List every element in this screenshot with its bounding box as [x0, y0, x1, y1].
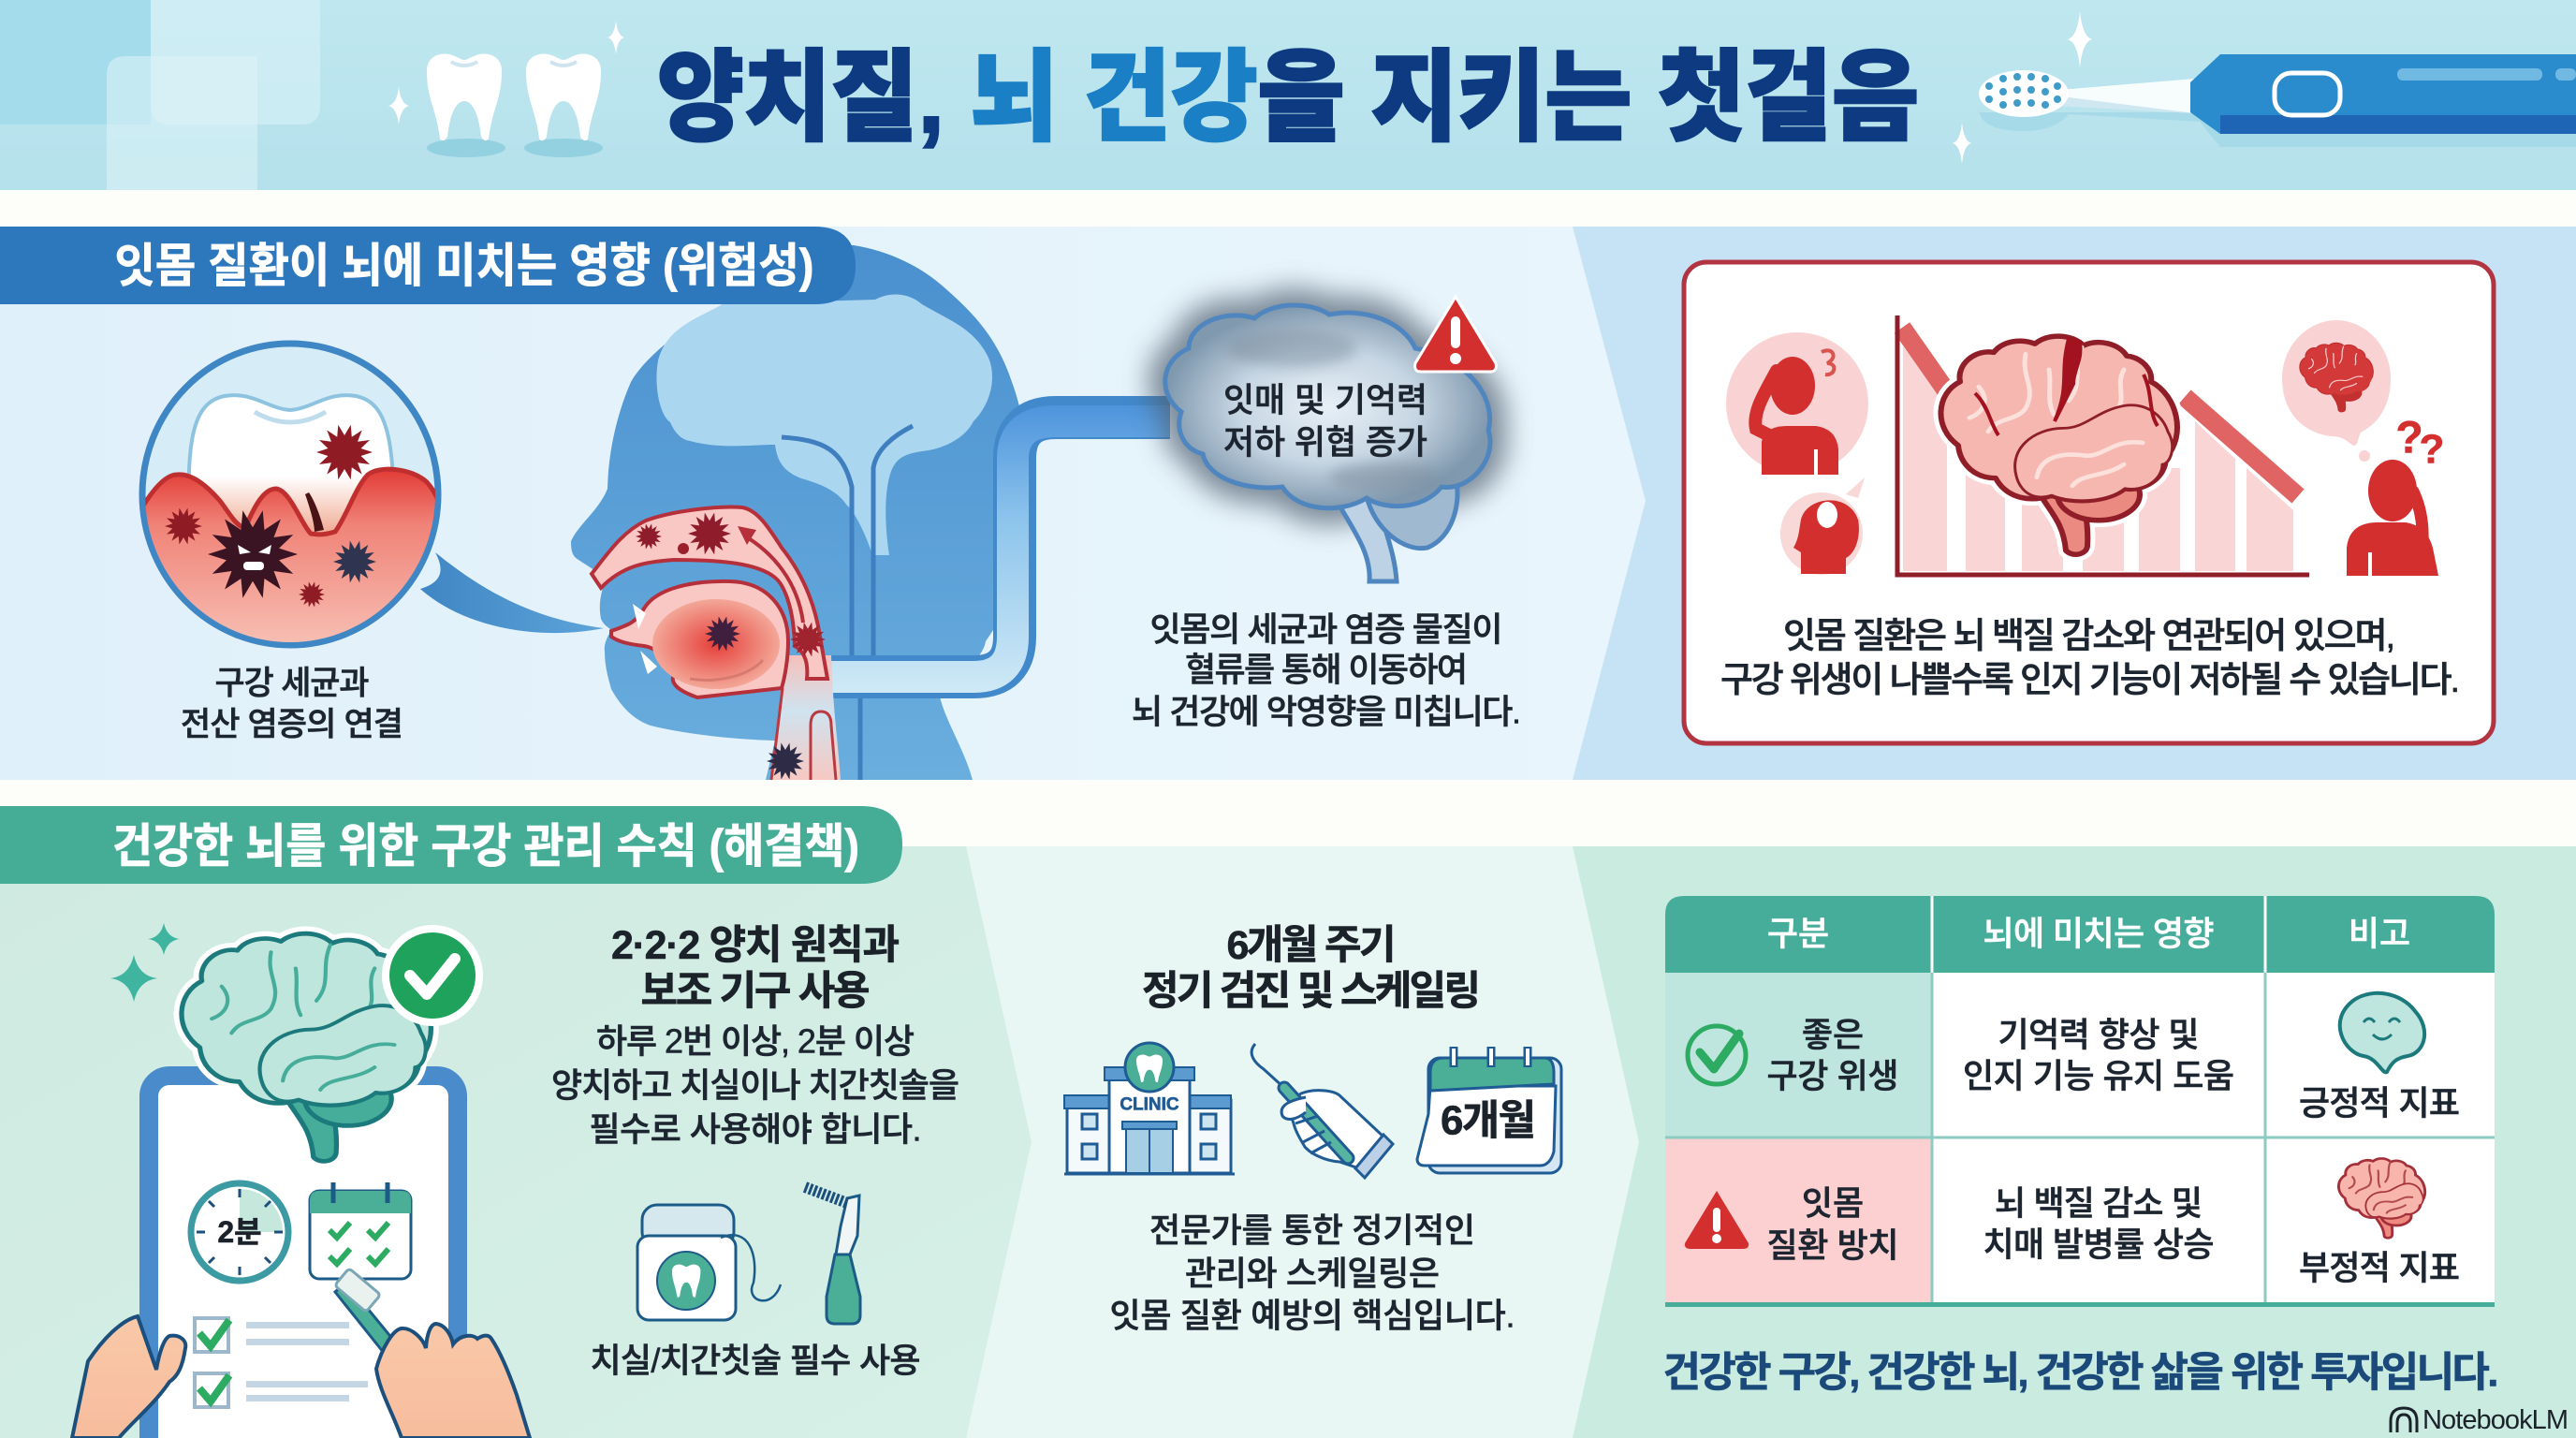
blood vessel pipe	[824, 418, 1170, 677]
icon: happy brain	[2340, 993, 2424, 1072]
six month check-up text	[1142, 923, 1481, 1014]
icon: interdental brush	[805, 1187, 860, 1324]
icon: six month calendar: 6개월	[1441, 1097, 1536, 1144]
gum tissue	[145, 466, 435, 642]
icon: clock 2 minutes	[191, 1183, 288, 1281]
blood flow explanation: 혈류를 통해 이동하여	[1185, 650, 1468, 689]
bacteria in gum	[165, 425, 376, 608]
row: untreated gum disease: 질환 방치	[1767, 1226, 1898, 1264]
table header	[1665, 896, 2495, 973]
six month check-up text: 정기 검진 및 스케일링	[1142, 969, 1481, 1014]
oral bacteria caption: 구강 세균과	[215, 665, 369, 702]
NotebookLM watermark: NotebookLM	[2422, 1405, 2569, 1435]
card explanation: 잇몸 질환은 뇌 백질 감소와 연관되어 있으며,	[1783, 617, 2395, 656]
icon: warning triangle	[1415, 297, 1496, 372]
2-2-2 rule text: 필수로 사용해야 합니다.	[590, 1110, 921, 1148]
scaling explanation: 잇몸 질환 예방의 핵심입니다.	[1110, 1296, 1515, 1335]
table header: 뇌에 미치는 영향	[1983, 914, 2215, 953]
scaling explanation: 전문가를 통한 정기적인	[1149, 1211, 1475, 1249]
icon: confused person: ?	[2395, 414, 2423, 462]
2-2-2 rule text: 하루 2번 이상, 2분 이상	[596, 1022, 915, 1060]
table header: 비고	[2349, 914, 2410, 953]
brain silhouette	[656, 295, 992, 555]
negative indicator label: 부정적 지표	[2299, 1249, 2460, 1286]
heading: risk banner	[0, 227, 856, 304]
head anatomy illustration	[571, 245, 1170, 780]
icon: clock 2 minutes: 2분	[217, 1215, 262, 1249]
panel: cognitive decline card	[1684, 262, 2494, 743]
right hand	[376, 1324, 530, 1438]
icon: green check badge	[382, 925, 483, 1026]
icon: dental clinic: CLINIC	[1120, 1095, 1179, 1114]
heading: solutions banner	[0, 806, 902, 884]
icon: two teeth	[427, 54, 603, 157]
icon: confused person: ?	[2420, 427, 2444, 472]
bacteria in head	[636, 513, 826, 779]
magnifier speech tail	[420, 552, 604, 633]
oral bacteria caption: 전산 염증의 연결	[181, 706, 403, 743]
checklist rows	[195, 1318, 368, 1407]
healthy green brain	[182, 933, 431, 1161]
icon: calendar checks	[310, 1182, 411, 1279]
arrow inside airway	[744, 536, 803, 623]
2-2-2 rule text: 보조 기구 사용	[640, 969, 871, 1014]
decline chart	[1897, 315, 2309, 575]
icon: thought bubble with brain	[2282, 320, 2391, 462]
blood flow explanation: 잇몸의 세균과 염증 물질이	[1149, 610, 1503, 648]
magnified gum circle	[140, 344, 445, 655]
card explanation: 구강 위생이 나쁠수록 인지 기능이 저하될 수 있습니다.	[1720, 661, 2460, 700]
large damaged brain	[1940, 336, 2177, 554]
oral bacteria caption	[181, 665, 403, 743]
row: untreated gum disease: 잇몸	[1802, 1183, 1864, 1223]
heading: solutions banner: 건강한 뇌를 위한 구강 관리 수칙 (해결책)	[112, 820, 859, 873]
comparison table	[1665, 896, 2495, 1307]
icon: sparkles	[110, 923, 180, 1002]
icon: sad brain	[2338, 1158, 2425, 1238]
row: good oral hygiene: 기억력 향상 및	[1998, 1015, 2200, 1054]
tablet checklist illustration	[72, 1076, 530, 1438]
icon: gloved hand with probe	[1251, 1044, 1393, 1178]
foggy brain cloud: 잇매 및 기억력	[1223, 380, 1427, 419]
nerve lines	[782, 426, 913, 780]
panel: oral care solutions section	[0, 806, 2576, 1438]
icon: sparkles in header	[388, 11, 2092, 164]
icon: person holding head	[1726, 332, 1868, 475]
heading: risk banner: 잇몸 질환이 뇌에 미치는 영향 (위험성)	[114, 240, 814, 292]
closing message: 건강한 구강, 건강한 뇌, 건강한 삶을 위한 투자입니다.	[1662, 1350, 2499, 1395]
2-2-2 rule text	[551, 923, 959, 1148]
icon: six month calendar	[1417, 1047, 1561, 1173]
row: good oral hygiene: 구강 위생	[1767, 1056, 1898, 1095]
blood flow explanation	[1132, 610, 1521, 730]
row: good oral hygiene	[1688, 1015, 2234, 1095]
icon: dental clinic	[1064, 1043, 1235, 1174]
table header: 구분	[1767, 914, 1829, 953]
icon: dental floss	[637, 1205, 781, 1320]
tooth	[189, 395, 394, 543]
throat and esophagus	[771, 655, 841, 780]
row: untreated gum disease: 뇌 백질 감소 및	[1995, 1183, 2203, 1223]
six month check-up text: 6개월 주기	[1226, 923, 1397, 968]
row: untreated gum disease	[1685, 1183, 2215, 1264]
scaling explanation: 관리와 스케일링은	[1185, 1255, 1440, 1292]
icon: electric toothbrush	[1979, 54, 2576, 147]
foggy brain cloud: 저하 위협 증가	[1223, 423, 1427, 461]
row: untreated gum disease: 치매 발병률 상승	[1983, 1225, 2215, 1264]
foggy brain cloud	[1165, 305, 1490, 581]
2-2-2 rule text: 2·2·2 양치 원칙과	[611, 923, 900, 968]
row: good oral hygiene: 인지 기능 유지 도움	[1963, 1056, 2234, 1095]
icon: head with memory loss	[1780, 477, 1865, 575]
header band	[0, 0, 2576, 190]
floss caption: 치실/치간칫술 필수 사용	[590, 1341, 921, 1380]
mouth cavity and tongue	[611, 581, 788, 697]
card explanation	[1720, 617, 2460, 700]
nasal cavity	[592, 507, 827, 679]
left hand	[72, 1316, 185, 1438]
panel: gum disease risk section	[0, 227, 2576, 780]
icon: toothbrush	[334, 1269, 423, 1390]
scaling explanation	[1110, 1211, 1515, 1335]
blood flow explanation: 뇌 건강에 악영향을 미칩니다.	[1132, 693, 1521, 730]
positive indicator label: 긍정적 지표	[2299, 1084, 2460, 1122]
title: 양치질, 뇌 건강을 지키는 첫걸음	[657, 43, 1919, 154]
icon: confused person	[2347, 414, 2444, 576]
row: good oral hygiene: 좋은	[1802, 1015, 1864, 1054]
2-2-2 rule text: 양치하고 치실이나 치간칫솔을	[551, 1065, 959, 1105]
